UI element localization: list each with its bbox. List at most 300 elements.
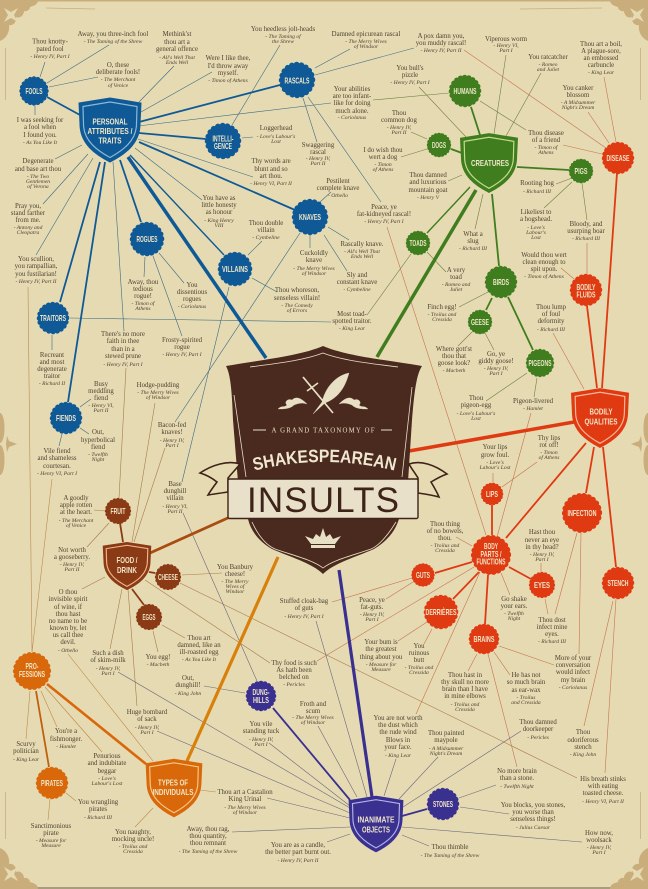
quote: bombard of sack: of sack <box>137 716 157 723</box>
quote: bull's pizzle: You bull's <box>396 65 424 72</box>
quote: stewed prune: There's no more <box>101 331 145 338</box>
node: Bodily Fluids: FLUIDS <box>576 290 596 300</box>
quote: woolsack: How now, <box>585 830 613 837</box>
node: Rascals: RASCALS <box>284 76 310 86</box>
quote: doorkeeper: Thou damned <box>519 719 557 726</box>
quote: invisible spirit of wine: invisible spirit <box>48 596 88 603</box>
quote: fat-kidneyed rascal: - Henry IV, Part I <box>364 219 405 225</box>
quote: swaggering rascal: - Henry IV, <box>306 156 331 162</box>
quote: mountain goat: mountain goat <box>408 187 448 194</box>
quote: senseless villain: of Errors <box>287 307 307 314</box>
quote: base dunghill villain: Part II <box>166 509 184 515</box>
quote: invisible spirit of wine: us call thee <box>53 632 83 639</box>
quote: shake your ears: Night <box>507 616 521 622</box>
shield: Bodily Qualities <box>571 389 629 447</box>
node: Rogues <box>132 224 162 254</box>
node: Dunghills: DUNG- <box>252 687 270 697</box>
quote: infant-like abilities: like for doing <box>334 100 371 107</box>
quote: throw away myself: myself. <box>218 70 238 77</box>
quote: eye in thy head: never an eye <box>525 537 559 544</box>
main trunks from central badge to six categories <box>128 157 574 797</box>
quote: base dunghill villain: villain <box>166 495 184 502</box>
quote: pigeon-egg: - Love's Labour's <box>457 411 495 417</box>
shield: Food / Drink <box>103 542 151 590</box>
quote: deliberate fools: - The Merchant <box>101 77 136 83</box>
node: Bodily Fluids <box>572 276 600 304</box>
quote: painted maypole: maypole <box>434 737 458 744</box>
quote: bacon-fed knaves: knaves! <box>161 429 183 436</box>
quote: hogshead: a hogshead. <box>520 216 552 223</box>
quote: little honesty: little honesty <box>201 202 237 209</box>
quote: finch egg: Finch egg! <box>427 304 457 311</box>
quote: hogshead: - Love's <box>527 225 545 231</box>
quote: brain than a stone: No more brain <box>497 768 537 775</box>
quote: invisible spirit of wine: - Othello <box>58 648 78 654</box>
quote: ear-wax: He has not <box>511 672 541 679</box>
quote: cloak-bag of guts: Stuffed cloak-bag <box>280 598 329 605</box>
quote: shameless courtesan: courtesan. <box>43 463 71 470</box>
quote: candle: the better part burnt out. <box>265 849 331 856</box>
quote: scullion: You scullion, <box>18 256 54 263</box>
quote: hodge-pudding: Hodge-pudding <box>137 382 180 389</box>
quote: cuckoldly knave: knave <box>306 257 322 264</box>
quote: apple rotten: A goodly <box>63 495 89 502</box>
quote: indubitate beggar: and indubitate <box>88 760 126 767</box>
node: Dogs <box>429 135 449 155</box>
node: Stench <box>604 569 632 597</box>
quote: scurvy politician: - King Lear <box>13 757 40 763</box>
node: Body Parts / Functions: BODY <box>484 541 498 551</box>
quote: painted maypole: - A Midsummer <box>429 746 464 752</box>
quote: gooseberry: a gooseberry. <box>54 554 90 561</box>
quote: shake your ears: - Twelfth <box>504 610 524 617</box>
quote: canker blossom: Night's Dream <box>561 105 594 111</box>
quote: senseless villain: senseless villain! <box>274 295 320 302</box>
quote: ruinous butt: butt <box>414 657 424 664</box>
quote: skim-milk: of skim-milk <box>90 657 126 664</box>
quote: pigeon-egg: pigeon-egg <box>461 402 492 409</box>
quote: meddling fiend: Busy <box>94 381 109 388</box>
quote: stewed prune: - Henry IV, Part I <box>103 362 144 368</box>
quote: standing tuck: - Henry IV, <box>249 737 274 743</box>
quote: brain in elbows: brain than I have <box>442 686 488 693</box>
quote: lips rot off: rot off! <box>539 442 559 449</box>
quote: wert a dog: - Timon <box>374 162 392 168</box>
quote: knotty-pated fool: pated fool <box>36 46 64 53</box>
quote: general offence: Methink'st <box>163 31 192 38</box>
quote: hodge-pudding: - The Merry Wives <box>137 390 179 396</box>
ribbon tails <box>200 463 447 497</box>
quote: frosty-spirited rogue: rogue <box>174 344 190 351</box>
quote: foul deformity: Thou lump <box>536 304 567 311</box>
node: Eggs <box>138 606 160 628</box>
quote: indubitate beggar: Labour's Lost <box>91 781 123 787</box>
quote: belched food: belched on <box>279 674 309 681</box>
quote: toasted cheese: toasted cheese. <box>583 790 624 797</box>
quote: little honesty: as honour <box>206 209 233 216</box>
quote: ear-wax: - Troilus <box>517 695 535 701</box>
quote: stand farther: stand farther <box>11 210 46 217</box>
quote: base dunghill villain: Base <box>168 481 182 488</box>
quote: very toad: A very <box>447 267 466 274</box>
quote: mocking uncle: - Troilus and <box>119 844 148 850</box>
quote: rascally knave: Rascally knave. <box>340 241 384 248</box>
quote: belched food: - Pericles <box>283 682 305 688</box>
shield: Bodily Qualities: QUALITIES <box>584 416 618 426</box>
quote: goose look: - Macbeth <box>443 368 466 374</box>
quote: pigeon-egg: Thou <box>469 395 484 402</box>
banner <box>228 479 418 518</box>
quote: spit upon: spit upon. <box>531 266 558 273</box>
quote: skim-milk: - Henry IV, <box>96 666 121 672</box>
quote: hogshead: Likeliest to <box>521 209 552 216</box>
quote: fat-kidneyed rascal: Peace, ye <box>371 204 397 211</box>
quote: shake your ears: Go shake <box>501 596 527 603</box>
node: Fiends <box>52 404 80 432</box>
quote: general offence: general offence <box>156 46 198 53</box>
node: Eyes <box>531 574 553 596</box>
node: Dunghills <box>248 683 274 709</box>
quote: giddy goose: Go, ye <box>487 351 505 358</box>
node: Disease: DISEASE <box>606 153 630 163</box>
quote: candle: - Henry IV, Part II <box>277 858 320 864</box>
node: Toads <box>408 233 428 253</box>
quote: thou rag: thou remnant <box>190 840 226 847</box>
quote: loggerhead: Loggerhead <box>260 125 293 132</box>
quote: boil and plague-sore: Thou art a boil, <box>580 41 622 48</box>
node: Derrieres <box>426 598 457 626</box>
quote: brain in elbows: Thou hast in <box>448 672 483 679</box>
quote: dissentious rogues: - Coriolanus <box>178 304 206 310</box>
quote: lips grow foul: - Love's <box>486 460 504 466</box>
quote: mocking uncle: You naughty, <box>115 829 151 836</box>
quote: cuckoldly knave: of Windsor <box>302 270 327 277</box>
quote: apple rotten: apple rotten <box>60 502 93 509</box>
quote: hyperbolical fiend: Out, <box>92 429 104 436</box>
quote: dust: the dust which <box>378 722 418 729</box>
quote: apple rotten: at the heart. <box>60 509 92 516</box>
node: Villains <box>220 254 250 284</box>
node: Rascals <box>282 65 312 95</box>
node: Pigeons: PIGEONS <box>528 358 552 368</box>
quote: common dog: Part II <box>390 130 408 136</box>
quote: giddy goose: Part I <box>488 371 504 377</box>
quote: swaggering rascal: rascal <box>310 149 326 156</box>
node: Derrieres: DERRIÈRES <box>426 607 457 617</box>
quote: wert a dog: of Athens <box>373 166 393 173</box>
quote: mocking uncle: mocking uncle! <box>112 836 154 843</box>
quote: spit upon: - Timon of Athens <box>524 273 564 280</box>
quote: King Urinal: King Urinal <box>229 796 261 803</box>
quote: brain in elbows: in mine elbows <box>444 693 486 700</box>
quote: invisible spirit of wine: no name to be <box>49 618 87 625</box>
quote: viperous worm: - Henry VI, <box>493 43 519 49</box>
node: Pirates: PIRATES <box>41 778 63 788</box>
quote: out dunghill: Out, <box>182 675 194 682</box>
quote: pigeon-egg: Lost <box>470 416 481 422</box>
quote: cuckoldly knave: Cuckoldly <box>300 250 329 257</box>
shield: Inanimate Objects: OBJECTS <box>362 824 390 834</box>
quote: degenerate: Degenerate <box>23 158 53 165</box>
quote: general offence: - All's Well That <box>159 55 195 61</box>
quote: pigeon-livered: - Hamlet <box>523 406 543 412</box>
quote: thou rag: - The Taming of the Shrew <box>179 848 238 855</box>
quote: spit upon: clean enough to <box>522 259 566 266</box>
node: Pigeons <box>528 351 552 375</box>
quote: shameless courtesan: Vile fiend <box>44 448 71 455</box>
node: Guts: GUTS <box>416 570 430 580</box>
quote: bull's pizzle: - Henry IV, Part I <box>390 80 431 86</box>
quote: odoriferous stench: Thou <box>576 729 591 736</box>
shield: Personal Attributes / Traits: ATTRIBUTES / <box>88 126 133 136</box>
quote: spit upon: Would thou wert <box>521 252 567 259</box>
node: Traitors: TRAITORS <box>40 313 66 323</box>
quote: degenerate traitor: - Richard II <box>39 381 66 387</box>
quote: lips grow foul: Labour's Lost <box>479 465 511 471</box>
quote: cuckoldly knave: - The Merry Wives <box>293 266 335 272</box>
connector lines: personal attributes quotes <box>35 45 414 482</box>
quote: wert a dog: I do wish thou <box>363 147 403 154</box>
node: Fruit: FRUIT <box>110 506 126 516</box>
node: Pigs <box>571 161 591 181</box>
quote: froth and scum: of Windsor <box>301 719 326 726</box>
quote: eye in thy head: Part I <box>534 557 550 563</box>
quote: very toad: - Romeo and <box>442 282 470 288</box>
quote: bull's pizzle: pizzle <box>402 72 418 79</box>
quote: mountain goat: and luxurious <box>409 179 447 186</box>
quote: infect my brain: conversation <box>556 662 591 669</box>
connector lines: creatures quotes <box>367 55 587 401</box>
node: Body Parts / Functions <box>474 538 508 572</box>
quote: goose look: goose look? <box>438 360 470 367</box>
quote: usurping boar: usurping boar <box>567 228 606 235</box>
quote: indubitate beggar: beggar <box>98 768 117 775</box>
quote: little honesty: You have as <box>203 195 236 202</box>
quote: common dog: - Henry IV, <box>387 125 412 131</box>
quote: meddling fiend: fiend <box>94 395 109 402</box>
quote: your bum: - Measure for <box>366 661 397 668</box>
quote: bombard of sack: - Henry IV, <box>135 725 160 731</box>
quote: painted maypole: Thou painted <box>428 730 465 737</box>
quote: sanctimonious pirate: - Measure for <box>36 837 67 844</box>
quote: infect my brain: More of your <box>555 655 592 662</box>
quote: scullion: - Henry IV, Part II <box>15 279 58 285</box>
quote: King Urinal: of Windsor <box>233 809 258 816</box>
quote: muddy rascal: A pox damn you, <box>418 33 465 40</box>
quote: lips grow foul: Your lips <box>483 444 508 451</box>
quote: frosty-spirited rogue: - Henry IV, Part I <box>162 352 203 358</box>
quote: infect mine eyes: Thou dost <box>538 617 566 624</box>
quote: base dunghill villain: dunghill <box>164 488 186 495</box>
quote: ear-wax: so much brain <box>507 679 546 686</box>
quote: tedious rogue: Away, thou <box>128 279 159 286</box>
quote: loggerhead: Lost <box>270 139 281 145</box>
quote: skim-milk: Such a dish <box>92 650 124 657</box>
quote: stand farther: Cleopatra <box>17 230 40 236</box>
quote: rascally knave: Ends Well <box>350 254 374 260</box>
node: Lips: LIPS <box>486 489 498 499</box>
quote: lips rot off: - Timon <box>540 450 558 456</box>
quote: bombard of sack: Huge bombard <box>127 709 168 716</box>
quote: lips grow foul: grow foul. <box>481 452 509 459</box>
quote: sanctimonious pirate: pirate <box>43 830 59 837</box>
quote: King Urinal: - The Merry Wives <box>224 805 266 811</box>
quote: thou rag: Away, thou rag, <box>187 826 230 833</box>
quote: degenerate traitor: traitor <box>44 373 61 380</box>
node: Infection: INFECTION <box>568 508 596 518</box>
quote: canker blossom: blossom <box>567 92 590 99</box>
quote: froth and scum: scum <box>306 708 321 715</box>
quote: hyperbolical fiend: Night <box>91 457 105 463</box>
quote: your bum: Your bum is <box>364 639 398 646</box>
quote: skim-milk: Part I <box>100 671 116 677</box>
node: Humans <box>451 77 479 105</box>
quote: loggerhead: - Love's Labour's <box>257 134 295 140</box>
quote: hyperbolical fiend: fiend <box>91 444 106 451</box>
quote: bacon-fed knaves: Bacon-fed <box>158 422 187 429</box>
quote: degenerate traitor: degenerate <box>37 366 67 373</box>
quote: degenerate traitor: Recreant <box>40 352 64 359</box>
quote: blocks and stones: you worse than <box>512 809 554 816</box>
quote: odoriferous stench: - King John <box>570 752 596 758</box>
quote: toasted cheese: - Henry VI, Part II <box>582 799 625 805</box>
subtitle rules <box>253 429 392 431</box>
node: Bodily Fluids: BODILY <box>576 282 596 292</box>
quote: infant-like abilities: are too infant- <box>333 93 372 100</box>
quote: brain than a stone: - Twelfth Night <box>500 783 534 790</box>
node: Fruit <box>107 500 129 522</box>
quote: out dunghill: - King John <box>175 691 201 697</box>
quote: blunt words: blunt and so <box>254 166 288 173</box>
quote: you egg: - Macbeth <box>147 662 170 668</box>
quote: mountain goat: - Henry V <box>417 195 440 201</box>
quote: doorkeeper: - Pericles <box>527 735 549 741</box>
quote: out dunghill: dunghill! <box>176 682 200 689</box>
connector lines: bodily qualities quotes <box>317 50 616 773</box>
node: Cheese <box>157 566 179 588</box>
quote: blocks and stones: - Julius Caesar <box>516 825 551 831</box>
quote: Banbury cheese: - The Merry <box>221 579 249 585</box>
quote: stewed prune: faith in thee <box>107 338 139 345</box>
node: Geese <box>470 312 490 332</box>
quote: King Urinal: Thou art a Castalion <box>217 789 273 796</box>
quote: your bum: the greatest <box>365 646 397 653</box>
quote: infect my brain: would infect <box>556 669 590 676</box>
quote: degenerate: and base art thou <box>15 166 62 173</box>
quote: thimble: Thou thimble <box>432 844 468 851</box>
quote: dust: Blows in <box>386 737 411 744</box>
quote: bombard of sack: Part I <box>139 730 155 736</box>
node: Fools <box>22 79 46 103</box>
quote: viperous worm: Part I <box>498 48 514 54</box>
quote: ratcatcher: and Juliet <box>537 67 560 73</box>
quote: senseless villain: Thou whoreson, <box>275 287 319 294</box>
quote: degenerate: Gentlemen <box>26 179 50 185</box>
quote: ill-roasted egg: - As You Like It <box>182 657 217 663</box>
quote: stand farther: from me. <box>16 217 41 224</box>
shield: Types of Individuals: TYPES OF <box>158 778 188 788</box>
quote: wrangling pirates: pirates <box>89 806 107 813</box>
quote: hyperbolical fiend: - Twelfth <box>88 451 108 458</box>
shield: Types of Individuals: INDIVIDUALS <box>152 787 194 797</box>
quote: slug: slug <box>467 238 479 245</box>
quote: cloak-bag of guts: - Henry IV, Part I <box>284 614 325 620</box>
node: Birds: BIRDS <box>493 277 509 287</box>
quote: senseless villain: - The Comedy <box>281 303 313 309</box>
quote: jolt-heads: You heedless jolt-heads <box>251 26 315 33</box>
quote: pestilent knave: Pestilent <box>326 178 350 185</box>
shield: Inanimate Objects <box>349 796 403 852</box>
quote: knotty-pated fool: Thou knotty- <box>32 38 69 46</box>
node: Pirates <box>38 769 66 797</box>
quote: general offence: thou art a <box>164 39 190 46</box>
quote: froth and scum: Froth and <box>300 701 327 708</box>
node: Villains: VILLAINS <box>222 264 248 274</box>
quote: double villain: Thou double <box>249 220 283 227</box>
quote: infant-like abilities: much alone. <box>335 108 369 115</box>
quote: ruinous butt: - Troilus and <box>405 665 434 671</box>
quote: shameless courtesan: - Henry VI, Part I <box>37 471 78 477</box>
quote: tedious rogue: - Timon of <box>131 300 156 307</box>
quote: brain in elbows: - Troilus and <box>451 702 480 708</box>
quote: goose look: Where gott'st <box>436 346 472 353</box>
quote: blocks and stones: senseless things! <box>510 816 556 823</box>
quote: tedious rogue: tedious <box>133 286 153 293</box>
quote: degenerate: - The Two <box>27 174 49 180</box>
quote: blunt words: art thou. <box>260 173 283 180</box>
quote: woolsack: Part I <box>591 850 607 856</box>
quote: toasted cheese: with eating <box>588 783 619 790</box>
quote: very toad: toad <box>450 274 462 281</box>
quote: fat-kidneyed rascal: fat-kidneyed rascal! <box>357 211 411 218</box>
quote: throw away myself: - Timon of Athens <box>208 77 248 84</box>
quote: scullion: you fustilarian! <box>15 271 57 278</box>
node: Humans: HUMANS <box>454 86 477 96</box>
quote: you egg: You egg! <box>146 654 170 661</box>
node: Intelligence <box>208 126 238 156</box>
quote: seeking a fool: - As You Like It <box>23 140 58 146</box>
quote: indubitate beggar: - Love's <box>98 776 116 782</box>
quote: wert a dog: wert a dog <box>369 154 398 161</box>
node: Knaves: KNAVES <box>299 212 321 222</box>
quote: shake your ears: your ears. <box>501 603 528 610</box>
quote: base dunghill villain: - Henry VI, <box>162 504 188 510</box>
quote: hogshead: Labour's <box>525 230 546 236</box>
shield body <box>226 346 422 574</box>
quote: Banbury cheese: Windsor <box>226 589 245 595</box>
quote: dissentious rogues: You <box>186 282 198 289</box>
node: Infection <box>565 496 599 530</box>
quote: throw away myself: I'd throw away <box>208 63 249 70</box>
quote: degenerate traitor: and most <box>40 359 64 366</box>
quote: rascally knave: - All's Well That <box>344 249 380 255</box>
quote: dissentious rogues: dissentious <box>177 289 207 296</box>
quote: fat-guts: Peace, ye <box>359 597 385 604</box>
quote: scurvy politician: Scurvy <box>16 741 36 748</box>
shield: Personal Attributes / Traits: TRAITS <box>98 136 122 146</box>
quote: wrangling pirates: - Richard III <box>84 815 113 821</box>
quote: dust: the rude wind <box>379 729 417 736</box>
shield: Food / Drink: FOOD / <box>116 555 138 565</box>
quote: slug: - Richard III <box>459 246 488 252</box>
quote: candle: You are as a candle, <box>271 842 325 849</box>
node: Eyes: EYES <box>534 580 550 590</box>
quote: standing tuck: Part I <box>253 742 269 748</box>
quote: bacon-fed knaves: Part I <box>164 443 180 449</box>
quote: giddy goose: - Henry IV, <box>484 366 509 372</box>
crown <box>305 528 341 548</box>
quote: no bowels: of no bowels, <box>427 528 464 535</box>
